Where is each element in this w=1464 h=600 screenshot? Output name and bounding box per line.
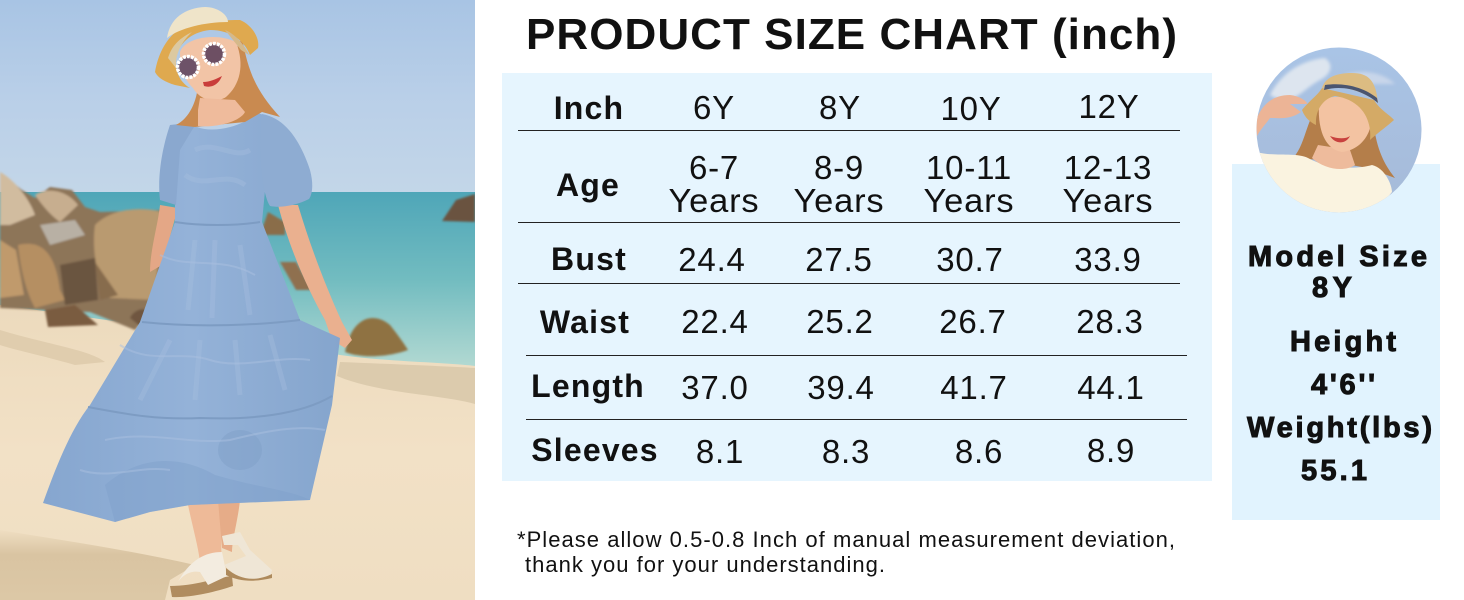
row: Age: Age — [556, 167, 620, 203]
row: Waist: 25.2 — [806, 303, 874, 340]
row: Inch: 6Y — [693, 89, 735, 126]
row: Age: Years — [668, 182, 760, 219]
row: Waist: 26.7 — [939, 303, 1007, 340]
row: Age — [556, 149, 1154, 219]
row: Length: 41.7 — [940, 369, 1008, 406]
photo: model portrait — [1256, 47, 1422, 214]
row: Length: 44.1 — [1077, 369, 1145, 406]
footnote: thank you for your understanding. — [525, 552, 885, 577]
blue dress — [43, 113, 340, 522]
photo: girl in blue dress on beach — [0, 0, 475, 600]
panel: model size: Weight(lbs) — [1247, 412, 1432, 444]
row: Age: 6-7 — [689, 149, 739, 186]
row: Waist: Waist — [540, 304, 630, 340]
row: Bust: Bust — [551, 241, 627, 277]
row: Age: Years — [924, 182, 1014, 219]
panel: model size: 55.1 — [1301, 455, 1367, 487]
beach rocks — [0, 172, 475, 356]
row: Age: 10-11 — [926, 149, 1012, 186]
panel: model size: 8Y — [1312, 272, 1352, 304]
row: Length: 37.0 — [681, 369, 749, 406]
row: Age: 8-9 — [814, 149, 864, 186]
row: Bust: 27.5 — [805, 241, 873, 278]
row: Sleeves: 8.1 — [696, 433, 744, 470]
girl arms and legs — [150, 205, 352, 562]
row: Waist: 22.4 — [681, 303, 749, 340]
row: Length — [531, 368, 1145, 406]
panel: size table — [502, 73, 1212, 481]
sunglasses — [178, 44, 224, 78]
row: Age: Years — [1062, 182, 1154, 219]
hair — [176, 38, 280, 127]
panel: model size — [1232, 164, 1440, 520]
footnote — [517, 527, 1175, 577]
row: Sleeves: 8.3 — [822, 433, 870, 470]
row: Length: 39.4 — [807, 369, 875, 406]
footnote: *Please allow 0.5-0.8 Inch of manual measurement deviation, — [517, 527, 1175, 552]
row: Inch: 8Y — [819, 89, 861, 126]
row: Sleeves: Sleeves — [531, 432, 659, 468]
face — [180, 37, 245, 126]
row: Sleeves: 8.9 — [1087, 432, 1135, 469]
row: Waist — [540, 303, 1144, 340]
row: Waist: 28.3 — [1076, 303, 1144, 340]
row: Age: Years — [794, 182, 884, 219]
panel: model size: 4'6'' — [1311, 369, 1375, 401]
panel: model size: Model Size — [1248, 241, 1427, 273]
straw hat — [155, 7, 258, 88]
row: Inch: 12Y — [1078, 88, 1140, 125]
row: Inch: Inch — [554, 90, 624, 126]
row: Age: 12-13 — [1064, 149, 1152, 186]
row: Sleeves: 8.6 — [955, 433, 1003, 470]
row: Bust — [551, 241, 1142, 278]
panel: model size: Height — [1290, 326, 1396, 358]
row: Bust: 33.9 — [1074, 241, 1142, 278]
row: Bust: 24.4 — [678, 241, 746, 278]
row: Inch: 10Y — [940, 90, 1002, 127]
sandals — [170, 532, 272, 597]
row: Length: Length — [531, 368, 645, 404]
row: Inch — [554, 88, 1140, 127]
title: PRODUCT SIZE CHART (inch) — [526, 10, 1177, 59]
row: Sleeves — [531, 432, 1135, 470]
sky, sea and sand background — [0, 0, 475, 600]
row: Bust: 30.7 — [936, 241, 1004, 278]
